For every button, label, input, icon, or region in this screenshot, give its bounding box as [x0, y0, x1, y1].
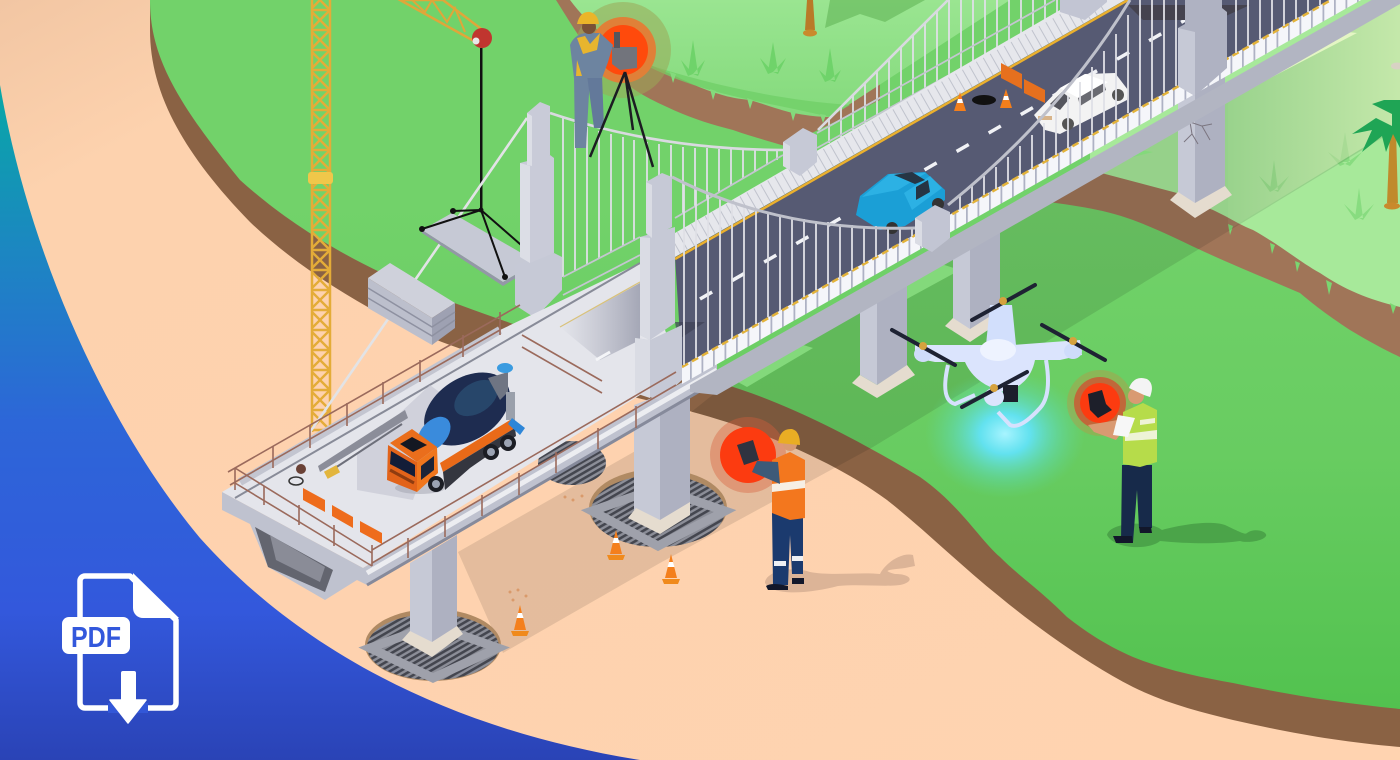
bridge shadow across the ground — [458, 0, 1400, 653]
grass tufts — [681, 40, 1374, 220]
traffic cones on sand — [511, 530, 680, 636]
right lawn soil — [1033, 100, 1400, 357]
car: blue van — [856, 172, 945, 234]
right lawn — [1090, 0, 1400, 307]
grass drips on right lawn edge — [1228, 224, 1396, 314]
light patch on right lawn — [1228, 0, 1400, 230]
dirt specks — [508, 494, 584, 602]
main suspension cables — [672, 0, 1130, 228]
long stay cable — [310, 118, 527, 432]
concrete deck section — [222, 263, 717, 600]
road damage: cones, barriers, pothole — [954, 63, 1045, 111]
rebar and tools on deck — [289, 410, 408, 485]
icon: PDF download — [62, 573, 179, 723]
grass drips on island edge — [670, 72, 826, 123]
car: white sedan — [1034, 73, 1128, 134]
palm trees — [803, 0, 1400, 210]
deck safety barriers — [303, 488, 382, 544]
bridge pylons and anchor blocks — [635, 0, 1227, 400]
far hanger cables and railing — [550, 0, 1085, 295]
pier footing rings — [365, 441, 727, 681]
pylon A on far side — [515, 102, 562, 318]
upper island soil — [556, 0, 880, 146]
cement mixer truck — [387, 357, 525, 494]
road deck with lanes — [675, 0, 1340, 368]
blue corner panel — [0, 85, 640, 760]
drone — [892, 285, 1105, 426]
piers — [402, 76, 1232, 657]
laser scanner worker on upper lawn — [570, 2, 671, 167]
lit lawn patches under bridge — [725, 148, 1153, 387]
near hanger cables — [684, 0, 1320, 365]
pier crack — [1180, 112, 1212, 144]
upper island lawn — [570, 0, 1010, 117]
upper island darker rim — [640, 62, 850, 117]
crane — [308, 0, 492, 432]
stack of concrete slabs — [368, 263, 455, 345]
construction railings — [228, 305, 676, 566]
drone pilot in lime vest — [1067, 370, 1157, 543]
drone light glow — [905, 370, 1105, 530]
inspector in orange vest with tablet — [710, 417, 805, 590]
icon: PDF download: PDF — [71, 622, 121, 654]
bright patch on right lawn — [1228, 30, 1357, 100]
suspended deck slab — [419, 208, 539, 286]
shadows of drone pilot and inspector — [765, 523, 1266, 592]
near-side white barrier — [682, 0, 1400, 395]
